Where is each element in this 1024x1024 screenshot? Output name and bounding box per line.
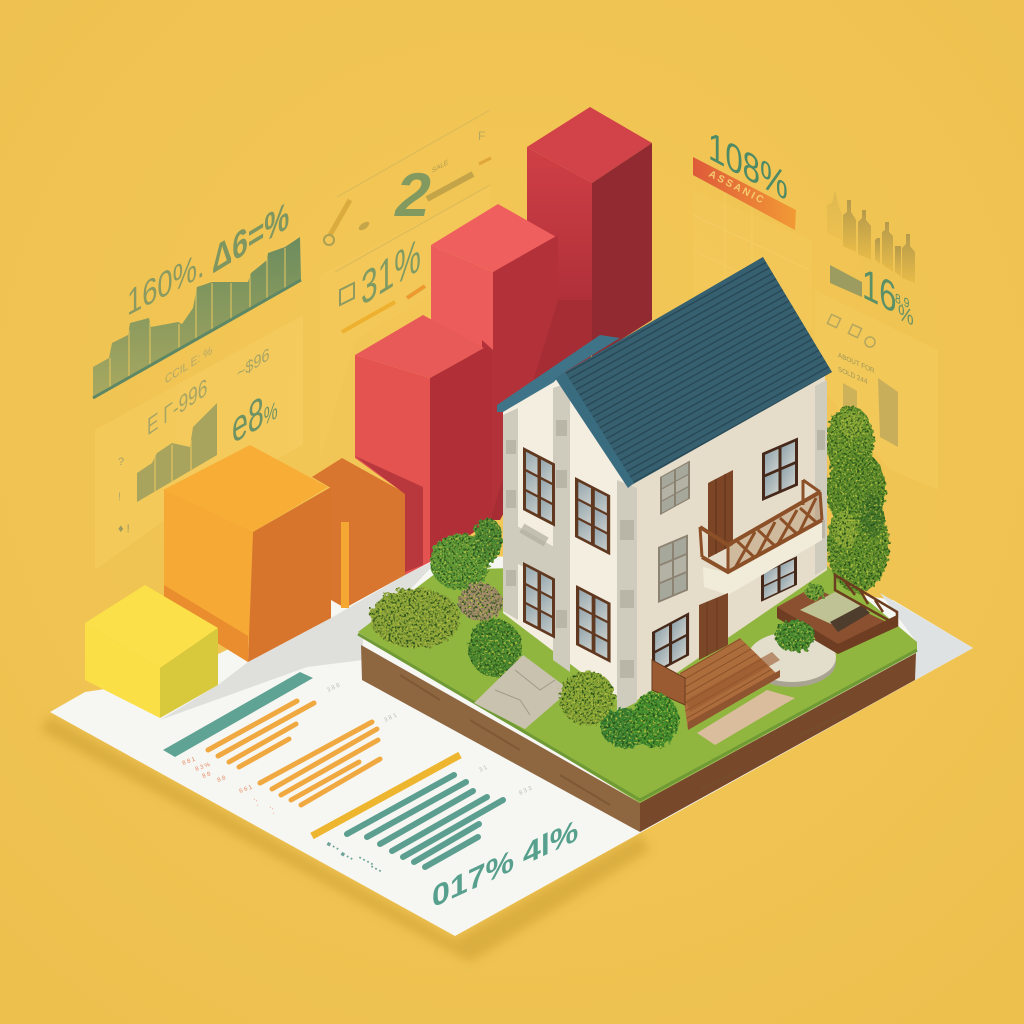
left wall — [503, 376, 628, 707]
underline bars — [342, 302, 395, 332]
small row labels: 6 6 1 — [239, 784, 254, 795]
right bottle chart panel: 8,9 — [895, 290, 910, 312]
value: 31%: 31% — [361, 228, 421, 316]
caption: CCIL E: % — [165, 342, 212, 387]
red block medium — [431, 204, 592, 520]
left bar chart with percentage headline — [93, 193, 301, 398]
chart baseline — [93, 280, 301, 398]
gable roof — [497, 335, 620, 412]
gold progress bar — [427, 174, 473, 199]
paper — [50, 555, 973, 936]
banner label: ASSANIC — [707, 169, 767, 207]
centre floating stats: SALE — [432, 158, 448, 175]
lower door — [699, 593, 728, 660]
right wall — [627, 372, 827, 707]
chip label — [830, 265, 862, 297]
faded bars — [843, 383, 857, 418]
stonework — [503, 380, 827, 712]
seating — [800, 592, 870, 628]
big numeral: 2 — [389, 161, 438, 230]
small row labels: 8 8 — [202, 771, 212, 780]
lower left faded chart panel: ! — [118, 491, 121, 503]
stepping stones — [697, 690, 795, 745]
value: 16%: 16 — [862, 259, 896, 324]
main roof — [560, 257, 832, 487]
orange block small — [312, 458, 405, 608]
gold header bar — [312, 755, 460, 836]
ground slab — [358, 560, 917, 832]
report sheet: ■ ▪ ▪ — [325, 841, 340, 853]
report sheet: 8 3 3 — [518, 785, 534, 797]
orange banner — [693, 157, 796, 230]
paved path — [474, 655, 570, 729]
house — [497, 257, 832, 712]
teal bars — [347, 775, 503, 867]
grass top — [358, 560, 917, 803]
balcony slab — [703, 522, 822, 595]
patio stone — [748, 632, 836, 687]
report sheet: ▪ ▪ ▪ — [369, 864, 383, 875]
small row labels: ' ' , — [251, 799, 261, 808]
small icons — [827, 314, 875, 347]
upper door — [708, 470, 733, 558]
orange bars group two — [260, 722, 380, 805]
balcony railing — [700, 480, 822, 572]
headline: 160%: 160%. — [127, 244, 205, 325]
report sheet: 3 1 — [478, 765, 489, 774]
report sheet: ■ ▪ ▪ — [339, 851, 354, 863]
terrace railing — [835, 575, 897, 625]
icon chip — [340, 283, 354, 305]
left wall windows — [523, 447, 555, 527]
red block short — [355, 315, 492, 575]
value 108% with banner — [693, 123, 796, 230]
value: $96: ~$96 — [237, 344, 270, 384]
soil left side — [361, 645, 640, 832]
teal header bar — [163, 672, 313, 757]
report sheet — [50, 555, 973, 936]
label: E 996: E Γ-996 — [147, 373, 207, 441]
report sheet: 3 8 8 — [326, 682, 342, 694]
right bottle chart panel: % — [898, 300, 914, 331]
small row labels: 8 3 % — [195, 762, 212, 773]
report sheet: 3 8 1 — [383, 712, 399, 724]
right bottle chart panel — [827, 190, 915, 447]
red block tall — [527, 107, 652, 358]
foreground bushes — [559, 584, 825, 748]
roof verge — [555, 372, 634, 488]
small side marks: ? — [118, 456, 124, 468]
headline: 6=%: Δ6=% — [212, 193, 289, 283]
right wall windows — [762, 438, 798, 501]
yellow block — [85, 585, 218, 718]
orange bars group one — [208, 701, 314, 767]
lower left faded chart panel — [118, 342, 278, 535]
lower left faded chart panel: ♦ ! — [118, 523, 130, 535]
small text lines: ABOUT FOR — [838, 352, 875, 375]
centre floating stats — [324, 110, 491, 332]
paper shadow — [40, 716, 650, 962]
big summary value: 017% 4l% — [432, 812, 578, 914]
floating data panels backdrop — [95, 180, 938, 570]
report sheet: ▪ ▪ ▪ ▪ — [357, 855, 375, 868]
front steps — [652, 638, 795, 745]
mini area chart — [137, 403, 217, 502]
centre floating stats: F — [478, 129, 485, 143]
small row labels — [182, 756, 277, 816]
bushes behind house — [370, 518, 522, 677]
side fence — [652, 660, 685, 705]
soil right side — [640, 653, 916, 832]
icon: pencil — [324, 200, 371, 245]
value: 108%: 108% — [708, 123, 788, 210]
small row labels: 8 8 — [217, 775, 227, 784]
shadow of blocks on paper — [160, 558, 440, 720]
tree — [826, 406, 889, 593]
orange block large — [163, 445, 331, 662]
area bars — [93, 237, 301, 398]
bottle bar chart — [827, 190, 915, 283]
right bottle chart panel: SOLD 244 — [838, 366, 868, 386]
small row labels: 8 8 1 — [182, 756, 197, 767]
small row labels: ' ' , — [267, 807, 277, 816]
garden terrace — [777, 575, 897, 654]
value: 86%: e8% — [232, 379, 278, 454]
